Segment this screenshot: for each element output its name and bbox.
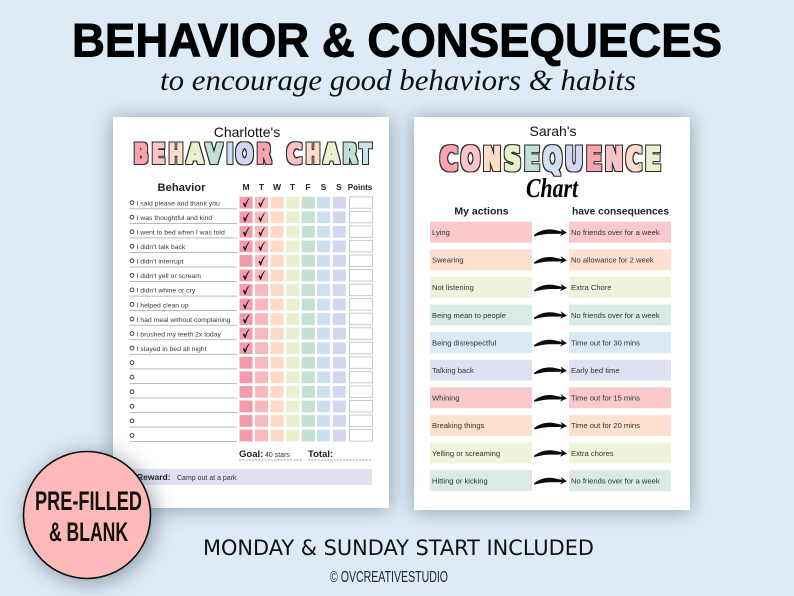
page background bbox=[414, 117, 690, 510]
consequences text bbox=[571, 228, 660, 485]
column headers: T bbox=[259, 182, 265, 192]
behavior labels: I brushed my teeth 2x today bbox=[136, 331, 222, 338]
consequences text: Early bed time bbox=[571, 366, 620, 375]
consequences text: No friends over for a week bbox=[571, 311, 660, 320]
consequences text: No friends over for a week bbox=[571, 476, 660, 485]
actions text: Being disrespectful bbox=[432, 338, 496, 347]
behavior labels: I had meal without complaining bbox=[136, 317, 231, 324]
bubble heading: consequence: Q bbox=[543, 140, 562, 178]
bubble heading: behavior chart: H bbox=[306, 139, 320, 170]
reward band bbox=[133, 469, 372, 485]
consequences text: Extra Chore bbox=[571, 283, 612, 292]
column headers bbox=[158, 182, 373, 194]
reward band: Reward: bbox=[137, 472, 171, 482]
actions text: Talking back bbox=[432, 366, 474, 375]
bubble heading: behavior chart: O bbox=[236, 139, 253, 170]
bubble heading: consequence: O bbox=[461, 140, 480, 178]
check marks bbox=[243, 198, 265, 353]
tracker rows bbox=[130, 197, 372, 442]
page background bbox=[113, 117, 389, 508]
bubble heading: consequence: E bbox=[586, 140, 602, 178]
behavior labels: I didn't whine or cry bbox=[136, 288, 196, 295]
actions text: Lying bbox=[432, 228, 450, 237]
behavior labels: I stayed in bed all night bbox=[136, 346, 207, 353]
consequences text: Time out for 15 mins bbox=[571, 394, 640, 403]
bubble heading: behavior chart: A bbox=[187, 139, 203, 170]
panel: behavior chart bbox=[113, 117, 389, 508]
behavior labels: I helped clean up bbox=[136, 302, 189, 309]
chart owner name: Charlotte's bbox=[214, 124, 280, 140]
bubble heading: behavior chart: E bbox=[152, 139, 165, 170]
bubble heading: consequence: E bbox=[645, 140, 661, 178]
actions text: Yelling or screaming bbox=[432, 449, 500, 458]
column headers: T bbox=[290, 182, 296, 192]
consequences text: Time out for 30 mins bbox=[571, 338, 640, 347]
bubble heading: behavior chart bbox=[134, 139, 371, 170]
actions text: Being mean to people bbox=[432, 311, 506, 320]
column headers: My actions bbox=[454, 206, 509, 218]
column headers: Behavior bbox=[158, 182, 206, 194]
column headers bbox=[454, 206, 669, 218]
column headers: S bbox=[321, 182, 327, 192]
footer note: start days: MONDAY & SUNDAY START INCLUDED bbox=[203, 536, 594, 560]
actions text: Swearing bbox=[432, 256, 464, 265]
bubble heading: consequence: C bbox=[440, 140, 458, 178]
bubble heading: behavior chart: C bbox=[287, 139, 302, 170]
bubble heading: consequence: E bbox=[524, 140, 540, 178]
bubble heading: consequence: S bbox=[504, 140, 521, 178]
bubble heading: behavior chart: V bbox=[206, 139, 222, 170]
subtitle: to encourage good behaviors & habits bbox=[160, 64, 636, 97]
goal and total: Total: bbox=[308, 449, 333, 460]
column headers: S bbox=[336, 182, 342, 192]
bubble heading: behavior chart: I bbox=[227, 139, 233, 170]
badge: pre-filled and blank: & BLANK bbox=[49, 517, 128, 547]
bubble heading: consequence: U bbox=[565, 140, 583, 178]
consequences text: No friends over for a week bbox=[571, 228, 660, 237]
goal and total: Goal: bbox=[239, 449, 263, 460]
arrows bbox=[534, 228, 567, 485]
bubble heading: consequence bbox=[440, 140, 661, 178]
chart script word: Chart bbox=[526, 173, 579, 203]
bubble heading: behavior chart: H bbox=[169, 139, 183, 170]
column headers: have consequences bbox=[572, 206, 669, 218]
actions text: Whining bbox=[432, 394, 459, 403]
bubble heading: consequence: C bbox=[626, 140, 642, 178]
actions text: Hitting or kicking bbox=[432, 476, 488, 485]
consequences text: No allowance for 2 week bbox=[571, 256, 654, 265]
reward band: Camp out at a park bbox=[177, 475, 237, 482]
bubble heading: consequence: N bbox=[605, 140, 623, 178]
behavior labels bbox=[136, 200, 231, 353]
copyright: © OVCREATIVESTUDIO bbox=[330, 569, 448, 586]
consequences text: Extra chores bbox=[571, 449, 614, 458]
bubble heading: consequence: N bbox=[483, 140, 501, 178]
bubble heading: behavior chart: B bbox=[134, 139, 148, 170]
column headers: F bbox=[305, 182, 311, 192]
column headers: Points bbox=[348, 183, 373, 192]
behavior labels: I didn't talk back bbox=[136, 244, 186, 251]
panel: consequence chart bbox=[414, 117, 690, 510]
chart owner name: Sarah's bbox=[529, 123, 577, 139]
behavior labels: I didn't interrupt bbox=[136, 259, 184, 266]
bubble heading: behavior chart: R bbox=[257, 139, 271, 170]
consequences text: Time out for 20 mins bbox=[571, 421, 640, 430]
bubble heading: behavior chart: R bbox=[343, 139, 357, 170]
badge: pre-filled and blank bbox=[24, 452, 150, 578]
bubble heading: behavior chart: A bbox=[324, 139, 339, 170]
actions text: Not listening bbox=[432, 283, 474, 292]
behavior labels: I went to bed when I was told bbox=[136, 230, 225, 236]
bubble heading: behavior chart: T bbox=[360, 139, 371, 170]
badge: pre-filled and blank: PRE-FILLED bbox=[35, 486, 142, 516]
goal and total bbox=[239, 449, 372, 460]
behavior labels: I was thoughtful and kind bbox=[136, 215, 212, 222]
column headers: W bbox=[273, 182, 282, 192]
action bands bbox=[430, 222, 671, 491]
behavior labels: I didn't yell or scream bbox=[136, 273, 201, 280]
goal and total: 40 stars bbox=[265, 452, 290, 459]
title: BEHAVIOR & CONSEQUECES bbox=[72, 14, 722, 66]
column headers: M bbox=[242, 182, 250, 192]
actions text bbox=[432, 228, 506, 485]
actions text: Breaking things bbox=[432, 421, 485, 430]
behavior labels: I said please and thank you bbox=[136, 200, 220, 207]
